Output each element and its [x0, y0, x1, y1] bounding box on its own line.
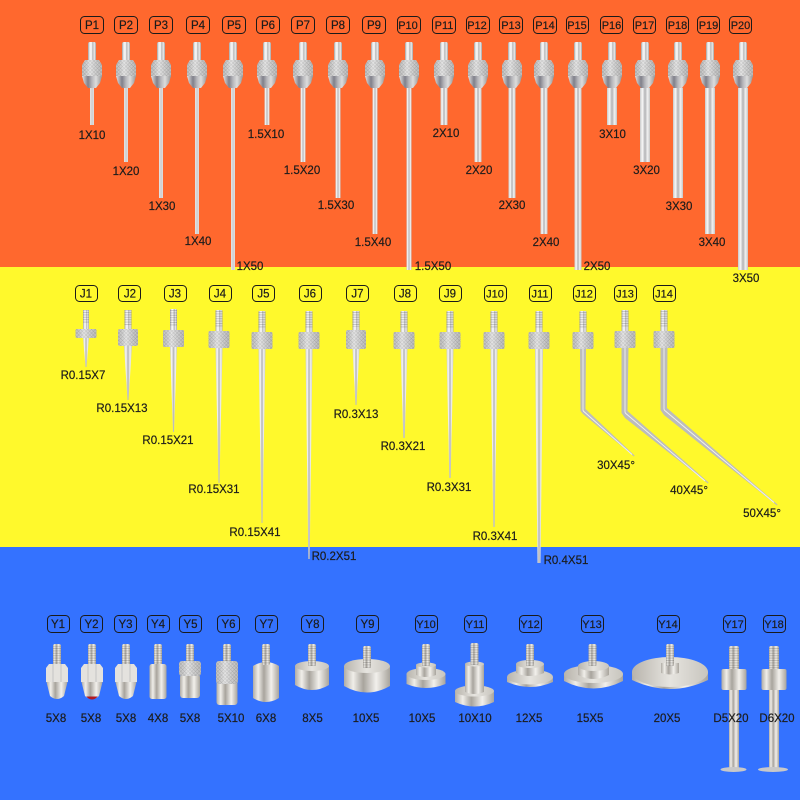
tag J4: J4 [214, 288, 227, 300]
contact point Y4 [150, 644, 166, 699]
spec 1.5X40: 1.5X40 [355, 237, 391, 249]
stylus P10 [399, 42, 419, 270]
contact point Y5 [179, 644, 201, 698]
spec 1.5X30: 1.5X30 [318, 200, 354, 212]
tag P12: P12 [467, 20, 487, 32]
contact point Y1 [46, 644, 68, 699]
needle J9 [440, 311, 460, 478]
contact point Y13 [564, 644, 623, 688]
tag P12 [466, 16, 490, 34]
contact point Y9 [344, 646, 390, 692]
tag Y5: Y5 [183, 619, 198, 631]
tag Y18: Y18 [764, 619, 784, 631]
contact point Y12 [507, 644, 553, 687]
bent needle J12 [572, 311, 634, 456]
bent needle J13 [614, 310, 708, 484]
tag Y6: Y6 [221, 619, 236, 631]
spec 3X50: 3X50 [733, 273, 759, 285]
tag P14: P14 [535, 20, 555, 32]
tag Y1 [48, 616, 70, 632]
tag J10: J10 [486, 288, 504, 300]
stylus P2 [116, 42, 136, 162]
panel: blue band [0, 547, 800, 800]
tag Y13 [582, 616, 604, 632]
tag P8 [326, 16, 350, 34]
spec R0.15X7: R0.15X7 [61, 370, 105, 382]
tag Y10: Y10 [416, 619, 436, 631]
spec R0.3X31: R0.3X31 [427, 482, 471, 494]
spec R0.3X21: R0.3X21 [381, 441, 425, 453]
tag P4: P4 [191, 20, 206, 32]
stylus P15 [568, 42, 588, 270]
spec 12X5: 12X5 [516, 713, 542, 725]
spec 5X10: 5X10 [218, 713, 244, 725]
needle J4 [208, 310, 230, 483]
panel: yellow band [0, 267, 800, 547]
tag Y17: Y17 [724, 619, 744, 631]
tag P17 [634, 16, 656, 34]
stylus P4 [187, 42, 207, 234]
spec 8X5: 8X5 [302, 713, 323, 725]
tag Y11 [464, 616, 486, 632]
stylus P18 [668, 42, 688, 198]
tag P17: P17 [635, 20, 654, 32]
tag Y11: Y11 [466, 619, 484, 631]
spec 5X8: 5X8 [81, 713, 101, 725]
tag Y3 [114, 616, 136, 632]
stylus P8 [328, 42, 348, 198]
stylus P1 [82, 42, 102, 125]
tag Y14 [658, 616, 680, 632]
stylus P19 [700, 42, 720, 234]
tag Y12 [520, 616, 542, 632]
tag P18: P18 [668, 20, 687, 32]
spec 15X5: 15X5 [577, 713, 603, 725]
tag Y2: Y2 [84, 619, 99, 631]
tag P6 [256, 16, 280, 34]
spec 5X8: 5X8 [116, 713, 136, 725]
needle J3 [163, 309, 184, 432]
tag Y12: Y12 [520, 619, 540, 631]
tag P8: P8 [331, 20, 345, 32]
spec R0.3X41: R0.3X41 [473, 531, 517, 543]
tag J2 [118, 286, 140, 302]
tag J12: J12 [575, 288, 593, 300]
spec 10X5: 10X5 [353, 713, 379, 725]
stylus P17 [635, 42, 655, 162]
tag P9: P9 [367, 20, 381, 32]
stylus P16 [602, 42, 622, 125]
tag P2: P2 [119, 20, 133, 32]
spec R0.15X13: R0.15X13 [96, 403, 148, 415]
tag P5 [222, 16, 246, 34]
tag J8: J8 [399, 288, 411, 300]
tag Y14: Y14 [658, 619, 678, 631]
tag P19 [698, 16, 720, 34]
tag P7: P7 [296, 20, 310, 32]
tag J1: J1 [80, 288, 92, 300]
bent needle J14 [654, 310, 778, 506]
spec 1X20: 1X20 [113, 166, 139, 178]
contact point Y3 [115, 644, 137, 699]
stylus P9 [365, 42, 385, 234]
spec 2X10: 2X10 [433, 128, 459, 140]
tag Y6 [218, 616, 240, 632]
spec 10X5: 10X5 [409, 713, 435, 725]
tag P1 [80, 16, 104, 34]
stylus P7 [293, 42, 313, 162]
tag P13: P13 [501, 20, 521, 32]
spec R0.3X13: R0.3X13 [334, 409, 378, 421]
tag P3 [150, 16, 172, 34]
spec 1.5X50: 1.5X50 [415, 261, 451, 273]
tag J3: J3 [169, 288, 181, 300]
tag P19: P19 [699, 20, 718, 32]
tag Y9 [356, 616, 378, 632]
spec 1X30: 1X30 [149, 201, 175, 213]
tag J7 [346, 286, 368, 302]
needle J8 [394, 311, 414, 438]
tag J5: J5 [257, 288, 270, 300]
tag J1 [76, 286, 98, 302]
tag J14 [654, 286, 676, 302]
tag P18 [666, 16, 688, 34]
tag P2 [114, 16, 138, 34]
spec 20X5: 20X5 [654, 713, 680, 725]
tag J3 [164, 286, 186, 302]
spec 1X10: 1X10 [79, 130, 105, 142]
tag P16: P16 [602, 20, 621, 32]
spec 1.5X10: 1.5X10 [248, 129, 284, 141]
panel: P series styluses [79, 16, 759, 285]
tag P9 [362, 16, 386, 34]
contact point Y7 [253, 644, 279, 702]
tag P20: P20 [731, 20, 750, 32]
tag P10: P10 [398, 20, 418, 32]
tag J14: J14 [655, 288, 673, 300]
spec R0.4X51: R0.4X51 [544, 555, 588, 567]
tag P3: P3 [154, 20, 168, 32]
stylus P13 [502, 42, 522, 198]
spec 6X8: 6X8 [256, 713, 276, 725]
spec 40X45°: 40X45° [670, 485, 708, 497]
tag Y3: Y3 [118, 619, 133, 631]
tag P15 [566, 16, 588, 34]
tag J4 [210, 286, 232, 302]
tag J11 [530, 286, 552, 302]
needle J1 [76, 310, 96, 367]
contact point Y2 red tip [81, 644, 103, 699]
tag Y1: Y1 [51, 619, 65, 631]
tag P1: P1 [85, 20, 99, 32]
spec 2X30: 2X30 [499, 200, 525, 212]
stylus P6 [257, 42, 277, 125]
spec 2X20: 2X20 [466, 165, 492, 177]
tag P7 [292, 16, 314, 34]
tag Y2 [80, 616, 102, 632]
needle J10 [484, 311, 504, 527]
tag J13 [614, 286, 636, 302]
contact point Y18 [758, 646, 788, 772]
contact point Y6 [216, 644, 238, 705]
tag P13 [500, 16, 522, 34]
tag J8 [394, 286, 416, 302]
contact point Y10 [406, 644, 446, 688]
spec R0.15X41: R0.15X41 [229, 527, 281, 539]
spec 5X8: 5X8 [180, 713, 200, 725]
panel: J series needles [61, 286, 781, 567]
spec 3X40: 3X40 [699, 237, 725, 249]
contact point Y11 [455, 643, 494, 706]
tag P11 [432, 16, 456, 34]
tag J6 [300, 286, 322, 302]
tag J12 [574, 286, 596, 302]
spec 3X30: 3X30 [666, 201, 692, 213]
tag J9: J9 [444, 288, 456, 300]
tag P20 [730, 16, 752, 34]
spec D6X20: D6X20 [759, 713, 795, 725]
tag Y17 [724, 616, 746, 632]
spec R0.2X51: R0.2X51 [312, 551, 356, 563]
tag Y10 [416, 616, 438, 632]
tag J7: J7 [351, 288, 364, 300]
spec 3X10: 3X10 [599, 129, 626, 141]
needle J7 [346, 311, 366, 405]
spec R0.15X21: R0.15X21 [142, 435, 194, 447]
stylus P11 [434, 42, 454, 125]
panel: orange band [0, 0, 800, 267]
tag Y7 [256, 616, 278, 632]
spec D5X20: D5X20 [713, 713, 749, 725]
tag Y7: Y7 [259, 619, 274, 631]
contact point Y8 [295, 644, 329, 690]
tag P4 [186, 16, 210, 34]
tag P5: P5 [227, 20, 241, 32]
spec 2X40: 2X40 [533, 237, 559, 249]
tag J5 [252, 286, 274, 302]
panel: Y series contact points [46, 616, 795, 772]
tag J2: J2 [124, 288, 136, 300]
contact point Y14 [632, 644, 708, 689]
tag P11: P11 [435, 20, 453, 32]
tag Y5 [180, 616, 202, 632]
tag P16 [600, 16, 622, 34]
tag Y4 [148, 616, 170, 632]
spec 30X45°: 30X45° [597, 460, 635, 472]
needle J6 [298, 311, 320, 559]
spec 5X8: 5X8 [46, 713, 66, 725]
tag Y9: Y9 [360, 619, 375, 631]
tag Y8 [302, 616, 324, 632]
spec 1X50: 1X50 [237, 261, 263, 273]
spec 10X10: 10X10 [458, 713, 492, 725]
tag Y13: Y13 [582, 619, 602, 631]
contact point Y17 [720, 646, 746, 772]
spec 3X20: 3X20 [633, 165, 660, 177]
spec 1.5X20: 1.5X20 [284, 165, 320, 177]
stylus P3 [151, 42, 171, 198]
tag J13: J13 [616, 288, 634, 300]
tag J9 [440, 286, 462, 302]
stylus P12 [468, 42, 488, 162]
spec 4X8: 4X8 [148, 713, 168, 725]
tag Y4: Y4 [151, 619, 166, 631]
stylus P5 [223, 42, 243, 270]
spec R0.15X31: R0.15X31 [188, 484, 240, 496]
stylus P14 [534, 42, 554, 234]
tag Y8: Y8 [305, 619, 320, 631]
spec 1X40: 1X40 [185, 236, 211, 248]
tag P6: P6 [261, 20, 275, 32]
tag Y18 [764, 616, 786, 632]
stylus P20 [733, 42, 753, 270]
tag P10 [398, 16, 420, 34]
needle J2 [118, 310, 138, 400]
needle J5 [252, 311, 272, 523]
spec 50X45°: 50X45° [743, 508, 781, 520]
spec 2X50: 2X50 [584, 261, 610, 273]
tag P15: P15 [567, 20, 587, 32]
tag J11: J11 [532, 288, 548, 300]
tag J6: J6 [304, 288, 316, 300]
tag J10 [484, 286, 506, 302]
needle J11 [528, 311, 550, 563]
tag P14 [534, 16, 556, 34]
